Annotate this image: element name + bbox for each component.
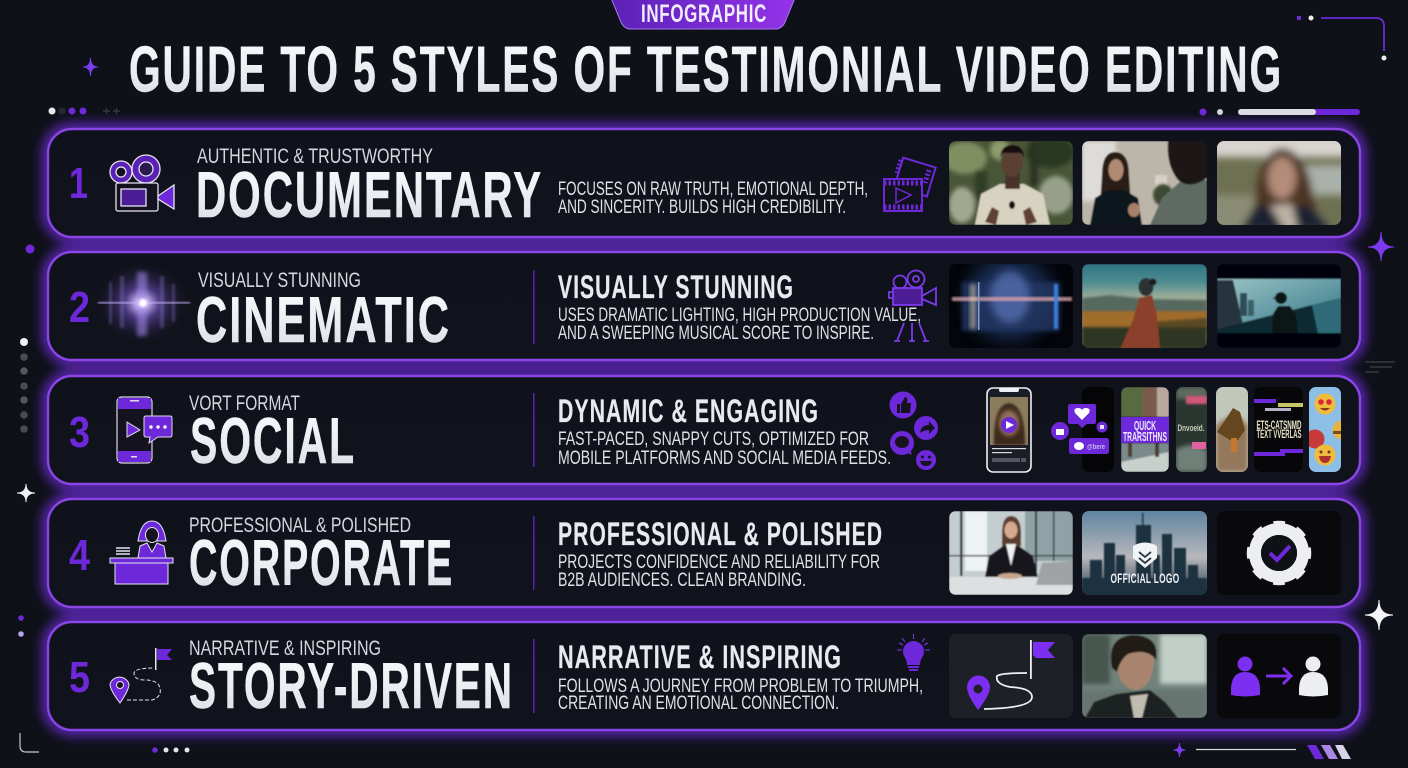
photo: man in forest [949,141,1073,225]
subheading: DYNAMIC & ENGAGING [558,393,819,429]
thumbnail: journey map [949,634,1073,718]
phone mockup [987,388,1031,472]
thumbnail: running figure [1216,387,1248,472]
panel 4: corporate [48,499,1360,607]
panel 1: documentary [48,129,1360,237]
thumbnail: quick transitions: TRARSITHNS [1123,429,1167,444]
description: FOCUSES ON RAW TRUTH, EMOTIONAL DEPTH, [558,179,868,200]
icon: journey path [110,648,172,703]
subtitle: NARRATIVE & INSPIRING [189,636,381,660]
photo: silhouette [1217,264,1341,348]
description: FOLLOWS A JOURNEY FROM PROBLEM TO TRIUMPH, [558,676,923,697]
thumbnail: person transformation [1217,634,1341,718]
heading: story-driven: STORY-DRIVEN [189,649,514,722]
subtitle: VORT FORMAT [189,391,300,415]
photo: city with official logo: OFFICIAL LOGO [1110,570,1180,586]
badge: infographic: INFOGRAPHIC [641,0,767,28]
description [558,429,891,469]
description: AND A SWEEPING MUSICAL SCORE TO INSPIRE. [558,323,874,344]
description: B2B AUDIENCES. CLEAN BRANDING. [558,570,806,591]
description: USES DRAMATIC LIGHTING, HIGH PRODUCTION VALUE, [558,305,921,326]
badge: infographic [611,0,795,29]
thumbnail: black strip with reactions [1051,387,1114,472]
number 3: 3 [69,408,90,457]
photo: blurred woman [1217,141,1341,225]
icon: film strips [884,158,936,211]
divider [533,639,534,713]
description: CREATING AN EMOTIONAL CONNECTION. [558,693,839,714]
photo: city with official logo [1082,511,1207,595]
description [558,179,868,218]
thumbnail: blurred motion [1176,387,1207,472]
description: MOBILE PLATFORMS AND SOCIAL MEDIA FEEDS. [558,448,891,469]
number 4: 4 [69,531,90,580]
panel glows [48,129,1360,730]
thumbnail: quick transitions: QUICK [1134,418,1156,433]
icon: light bulb [897,634,930,671]
icon: lens flare [96,263,190,343]
subtitle: VISUALLY STUNNING [198,268,361,292]
number 2: 2 [69,283,90,332]
panel 5: story-driven [48,622,1360,730]
photo: interview [1082,141,1207,225]
icon: social reactions [890,392,938,470]
icon: film camera [110,155,174,211]
description [558,552,880,591]
description: AND SINCERITY. BUILDS HIGH CREDIBILITY. [558,197,846,218]
heading: documentary: DOCUMENTARY [196,158,543,231]
thumbnail: emojis [1309,387,1341,472]
heading: corporate: CORPORATE [189,526,454,599]
thumbnail: text overlays: ETS-CATSNMD [1256,420,1302,432]
divider [533,270,534,344]
description: FAST-PACED, SNAPPY CUTS, OPTIMIZED FOR [558,429,869,450]
photo: young man [1082,634,1207,718]
panel 3: social [48,376,1360,484]
gear with check [1217,511,1341,595]
panel 2: cinematic [48,252,1360,360]
subheading: PROFESSIONAL & POLISHED [558,516,883,552]
subheading: VISUALLY STUNNING [558,269,794,305]
divider [533,393,534,467]
number 5: 5 [69,653,90,702]
icon: phone with chat bubble [117,397,172,463]
thumbnail: text overlays: TEXT VVERLAS [1256,429,1302,441]
photo: woman in landscape [1082,264,1207,349]
description: PROJECTS CONFIDENCE AND RELIABILITY FOR [558,552,880,573]
photo: businesswoman [949,511,1073,595]
subtitle: PROFESSIONAL & POLISHED [189,513,411,537]
heading: cinematic: CINEMATIC [196,283,451,356]
subheading: NARRATIVE & INSPIRING [558,639,842,675]
divider [533,516,534,590]
thumbnail: quick transitions [1121,387,1169,472]
number 1: 1 [69,159,88,208]
thumbnail: blurred motion: Dnvoeid. [1178,423,1204,433]
photo: anamorphic flare [949,256,1073,348]
thumbnail: black strip with reactions: @bere [1087,444,1105,451]
heading: social: SOCIAL [190,404,356,477]
icon: person at desk [110,521,173,584]
description [558,676,923,714]
thumbnail: text overlays [1254,387,1303,472]
icon: camera on tripod [889,270,936,341]
subtitle: AUTHENTIC & TRUSTWORTHY [197,144,433,168]
description [558,305,921,344]
